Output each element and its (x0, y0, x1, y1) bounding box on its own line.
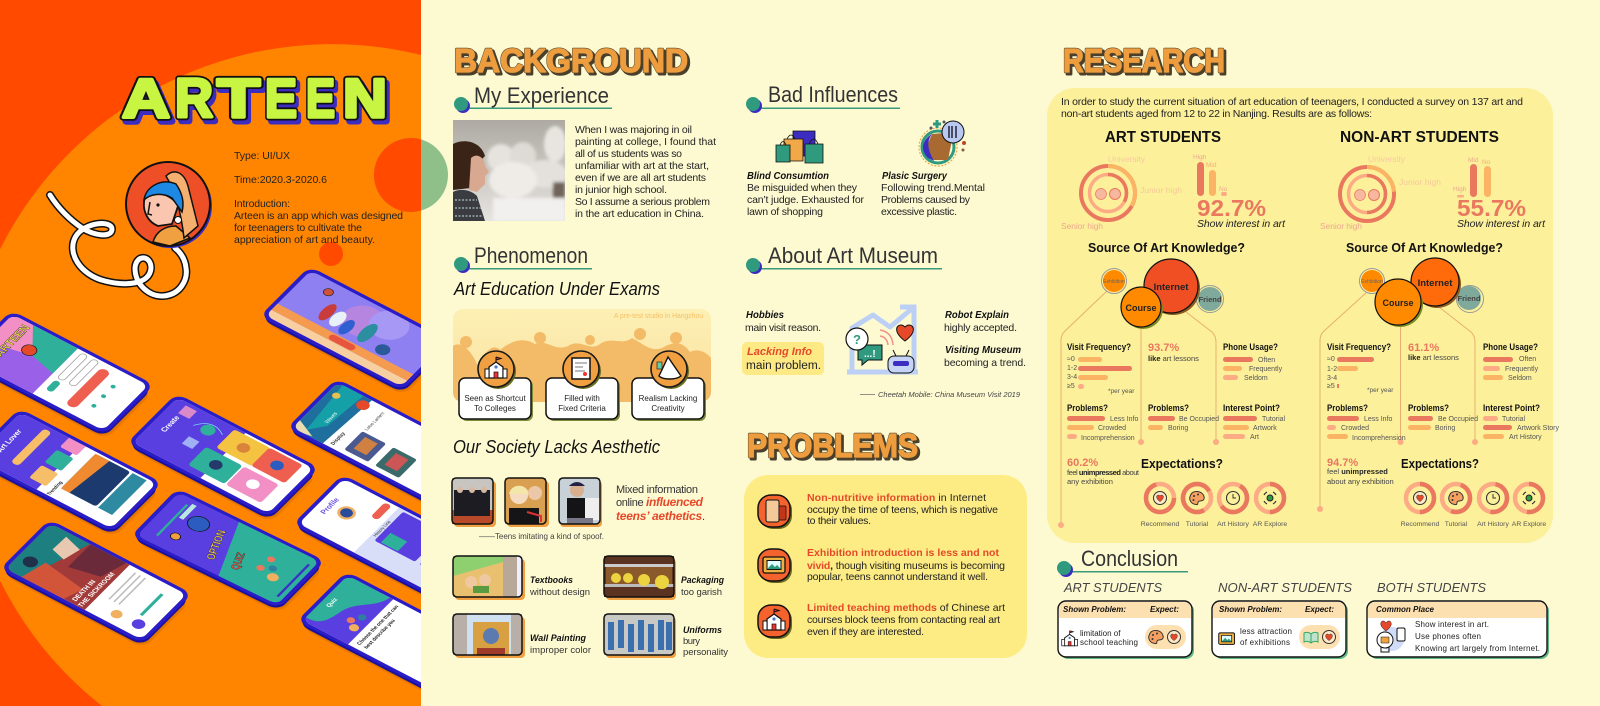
problem: exhibition introduction: popular, teens cannot understand it well. (807, 571, 988, 583)
chart: exhibition problems: Crowded (1341, 425, 1369, 432)
subheading: Phenomenon (454, 243, 592, 273)
problem: limited teaching methods: courses block teens from contacting real art (807, 614, 1000, 626)
stat: unimpressed: feel unimpressed (1327, 467, 1388, 476)
text: my experience body: unfamiliar with art at the start, (575, 160, 709, 172)
labels: expectations: AR Explore (1253, 521, 1287, 528)
panel: conclusion both students: Knowing art largely from Internet. (1415, 644, 1540, 653)
example: textbooks: without design (529, 587, 590, 598)
stat: unimpressed: feel unimpressed about (1067, 468, 1140, 477)
example: wall painting: Wall Painting (530, 633, 586, 644)
panel: conclusion non-art students (1212, 581, 1353, 659)
photos: teens imitating spoof (452, 478, 602, 527)
text: blind consumption: Blind Consumtion (747, 170, 829, 182)
chart: interest point: Art (1250, 434, 1259, 441)
heading: expectations: Expectations? (1141, 456, 1223, 471)
text: plastic surgery: excessive plastic. (881, 206, 957, 218)
text: mixed information: teens’ aethetics. (616, 509, 705, 523)
chart: visit frequency: ≈0 (1327, 356, 1335, 363)
panel: conclusion art students: limitation of (1080, 629, 1121, 638)
panel: problems (744, 475, 1027, 658)
text: my experience body: all of us students was so (575, 148, 682, 160)
heading: art students: ART STUDENTS (1105, 129, 1221, 146)
panel: conclusion both students: BOTH STUDENTS (1377, 581, 1487, 595)
title: ARTEEN: E (268, 71, 300, 133)
title: ARTEEN: E (306, 67, 335, 129)
example: uniforms: personality (683, 647, 728, 658)
chart: interest bars: Mid (1468, 157, 1479, 164)
labels: expectations: Art History (1217, 521, 1249, 528)
chart: interest bars: Show interest in art (1457, 218, 1546, 230)
card: realism lacking creativity: Creativity (651, 404, 685, 413)
card: fixed criteria: Fixed Criteria (558, 404, 606, 413)
text: plastic surgery (881, 170, 985, 218)
problem: exhibition introduction: Exhibition introduction is less and not (807, 547, 1000, 559)
small red dot (319, 242, 343, 266)
chart: phone usage (1223, 342, 1283, 382)
example: packaging: Packaging (681, 575, 724, 586)
subheading: About Art Museum: About Art Museum (768, 243, 938, 268)
example: uniforms: Uniforms (683, 625, 722, 636)
chart: phone usage: Often (1258, 357, 1275, 364)
icon: museum house robot (846, 307, 918, 373)
problem: exhibition introduction: vivid, though visiting museums is becoming (807, 560, 1005, 572)
callout: lacking info (742, 342, 824, 375)
stat: like art lessons (1148, 342, 1199, 363)
phone: display: Lotus Lantern (363, 411, 386, 431)
text: hobbies: Hobbies (746, 309, 784, 321)
phone: art lover (0, 412, 158, 534)
phone: display (291, 382, 421, 502)
chart: lesson problems: Problems? (1408, 403, 1449, 414)
stat: unimpressed (1327, 457, 1394, 486)
text: blind consumption: can’t judge. Exhausted for (747, 194, 864, 206)
panel: conclusion art students: school teaching (1080, 638, 1138, 647)
chart: phone usage: Frequently (1505, 366, 1539, 373)
connector lines (1320, 292, 1475, 509)
text: my experience body: painting at college, I found that (575, 136, 716, 148)
subheading: Phenomenon: Phenomenon (474, 243, 588, 268)
chart: visit frequency: *per year (1367, 387, 1394, 394)
title: ARTEEN: N (343, 67, 387, 129)
text: my experience body: So I assume a serious problem (575, 196, 710, 208)
stat: like art lessons: like art lessons (1148, 354, 1199, 363)
text: my experience body: even if we are all art students (575, 172, 706, 184)
text: my experience body: in junior high school. (575, 184, 667, 196)
title: ARTEEN: R (175, 67, 213, 129)
text: project info: Time:2020.3-2020.6 (234, 174, 327, 186)
labels: expectations (1141, 521, 1287, 528)
title: ARTEEN: R (175, 67, 213, 129)
problem: non-nutritive information: to their values. (807, 515, 871, 527)
panel: conclusion art students: Shown Problem: (1063, 605, 1126, 614)
column: non-art students (1317, 129, 1560, 528)
chart: knowledge bubbles: Friend (1458, 294, 1481, 303)
text: project info (234, 150, 403, 246)
text: research intro: In order to study the current situation of art education of teenagers, I conducted a survey on 137 art and (1061, 96, 1523, 108)
chart: exhibition problems: Less Info (1364, 416, 1393, 423)
panel: cover (0, 0, 421, 706)
chart: phone usage: Phone Usage? (1223, 342, 1278, 353)
chart: phone usage: Seldom (1508, 375, 1532, 382)
chart: lesson problems: Boring (1435, 425, 1455, 432)
chart: lesson problems: Boring (1168, 425, 1188, 432)
chart: expectation donuts (1406, 480, 1543, 516)
title: ARTEEN: T (217, 67, 260, 129)
chart: interest bars: No (1219, 186, 1228, 193)
title: ARTEEN: E (309, 71, 338, 133)
heading: PROBLEMS: PROBLEMS (747, 427, 918, 464)
caption: teens imitating: ——Teens imitating a kind of spoof. (479, 532, 604, 541)
heading: source of art knowledge: Source Of Art Knowledge? (1346, 240, 1503, 255)
phone: profile (297, 478, 421, 596)
chart: expectation donuts (1146, 479, 1284, 517)
panel: conclusion both students: Common Place (1376, 605, 1435, 614)
heading: BACKGROUND: BACKGROUND (454, 42, 688, 79)
icon: girl with pearl earring logo and squiggle (50, 162, 212, 296)
title: ARTEEN: N (346, 71, 390, 133)
chart: knowledge bubbles: Internet (1154, 282, 1189, 293)
phone: quiz: best describe you (363, 619, 397, 650)
chart: knowledge bubbles: Course (1382, 298, 1414, 308)
example: uniforms (604, 614, 728, 658)
subheading: My Experience: My Experience (474, 83, 609, 108)
column: art students (1058, 129, 1287, 528)
title: ARTEEN: A (122, 67, 170, 129)
example: wall painting: improper color (530, 645, 591, 656)
phone: death in the sickroom (4, 522, 188, 645)
stat: like art lessons: 93.7% (1148, 342, 1179, 354)
chart: interest bars: 55.7% (1457, 195, 1526, 221)
icon: museum house robot: ...! (864, 349, 876, 360)
phone: profile: Profile (318, 496, 341, 516)
stat: like art lessons: like art lessons (1408, 353, 1459, 362)
phone: login (0, 314, 150, 436)
chart: lesson problems: Problems? (1148, 403, 1189, 414)
example: uniforms: bury (683, 636, 700, 647)
title: ARTEEN: A (122, 67, 170, 129)
chart: interest bars: 92.7% (1197, 195, 1266, 221)
text: research intro (1061, 96, 1523, 120)
text: visiting museum: becoming a trend. (944, 357, 1026, 369)
panel: conclusion art students (1058, 581, 1194, 659)
heading: BACKGROUND: BACKGROUND (456, 44, 690, 81)
photo: museum visitor (453, 120, 565, 221)
decorative circle: red green (374, 138, 448, 212)
text: plastic surgery: Plasic Surgery (882, 170, 948, 182)
callout: lacking info: main problem. (746, 360, 821, 372)
card: shortcut to colleges: To Colleges (474, 404, 516, 413)
chart: interest point: Artwork Story (1517, 425, 1560, 432)
text: hobbies: main visit reason. (745, 322, 821, 334)
icon: museum house robot: ? (853, 332, 861, 347)
chart: interest point: Interest Point? (1483, 403, 1540, 414)
text: visiting museum: Visiting Museum (945, 344, 1021, 356)
chart: school level donut (1320, 154, 1441, 231)
heading: RESEARCH: RESEARCH (1063, 42, 1225, 79)
icon: plastic surgery face (919, 120, 966, 166)
text: blind consumption: lawn of shopping (747, 206, 823, 218)
card: fixed criteria: Filled with (564, 394, 600, 403)
phone: art lover: Trending (46, 480, 65, 496)
caption: pre-test studio: A pre-test studio in Hangzhou (614, 311, 703, 320)
chart: exhibition problems: Crowded (1098, 425, 1126, 432)
chart: visit frequency: Visit Frequency? (1067, 342, 1131, 353)
chart: visit frequency: ≥5 (1327, 383, 1335, 390)
text: robot explain: highly accepted. (944, 322, 1017, 334)
heading: RESEARCH: RESEARCH (1063, 42, 1225, 79)
chart: interest bars (1193, 154, 1286, 230)
labels: expectations: Art History (1477, 521, 1509, 528)
chart: visit frequency: 3-4 (1327, 375, 1337, 382)
panel: conclusion non-art students: less attraction (1240, 627, 1292, 636)
chart: interest bars: High (1193, 154, 1207, 161)
title: ARTEEN: A (125, 71, 173, 133)
stat: like art lessons: 61.1% (1408, 342, 1439, 354)
chart: exhibition problems: Less Info (1110, 416, 1139, 423)
stat: like art lessons (1408, 342, 1459, 362)
chart: school level donut: Senior high (1320, 221, 1362, 231)
chart: visit frequency (1067, 342, 1135, 395)
panel: conclusion both students (1367, 581, 1549, 659)
icon: shopping bags (776, 131, 823, 163)
panel: conclusion art students: ART STUDENTS (1063, 581, 1163, 595)
phone: quiz (301, 574, 421, 690)
problem: limited teaching methods (758, 602, 1005, 639)
phone: quiz: Quiz (326, 597, 340, 609)
chart: lesson problems (1148, 403, 1219, 432)
text: project info: appreciation of art and beauty. (234, 234, 375, 246)
text: visiting museum (944, 344, 1026, 369)
panel: conclusion both students: Show interest in art. (1415, 620, 1489, 629)
card: realism lacking creativity: Realism Lacking (639, 394, 697, 403)
phone: option quiz: OPTION (205, 529, 229, 561)
chart: visit frequency (1327, 342, 1394, 394)
chart: school level donut (1061, 154, 1182, 231)
chart: interest point: Tutorial (1262, 416, 1286, 423)
card: realism lacking creativity (632, 351, 706, 421)
chart: lesson problems (1408, 403, 1478, 432)
title: ARTEEN: E (265, 67, 297, 129)
panel: conclusion both students: Use phones often (1415, 632, 1481, 641)
phone: timeline (264, 270, 421, 392)
subheading: Our Society Lacks Aesthetic: Our Society Lacks Aesthetic (453, 437, 660, 457)
chart: visit frequency: ≥5 (1067, 383, 1075, 390)
text: hobbies (745, 309, 821, 334)
labels: expectations (1401, 521, 1546, 528)
chart: visit frequency: *per year (1108, 388, 1135, 395)
chart: interest point: Interest Point? (1223, 403, 1280, 414)
chart: knowledge bubbles: Friend (1199, 295, 1222, 304)
chart: school level donut: Senior high (1061, 221, 1103, 231)
panel: conclusion non-art students: Expect: (1305, 605, 1334, 614)
chart: school level donut: Junior high (1399, 177, 1441, 187)
chart: interest bars: Show interest in art (1197, 218, 1286, 230)
phone: quiz: Choose the one that can (356, 604, 401, 646)
title: ARTEEN: R (178, 71, 216, 133)
phone: option quiz (135, 492, 321, 610)
card: shortcut to colleges: Seen as Shortcut (464, 394, 526, 403)
text: mixed information (616, 484, 705, 523)
heading: source of art knowledge: Source Of Art Knowledge? (1088, 240, 1245, 255)
chart: exhibition problems: Problems? (1327, 403, 1368, 414)
subheading: Conclusion (1057, 546, 1188, 577)
chart: interest point (1223, 403, 1286, 441)
phone: profile: History Line (372, 519, 392, 537)
chart: knowledge bubbles (1102, 259, 1224, 329)
example: textbooks (453, 556, 590, 600)
panel: research (1047, 88, 1560, 543)
panel: conclusion non-art students: of exhibitions (1240, 638, 1290, 647)
chart: exhibition problems: Incomprehension (1081, 435, 1135, 442)
card: fixed criteria (546, 351, 620, 421)
stat: unimpressed: about any exhibition (1327, 477, 1394, 486)
text: project info: for teenagers to cultivate the (234, 222, 362, 234)
text: project info: Introduction: (234, 198, 290, 210)
chart: knowledge bubbles: Exhibition (1361, 279, 1383, 285)
heading: non-art students: NON-ART STUDENTS (1340, 129, 1499, 146)
stat: unimpressed: 94.7% (1327, 457, 1358, 469)
text: project info: Type: UI/UX (234, 150, 290, 162)
heading: RESEARCH: RESEARCH (1065, 44, 1227, 81)
text: mixed information: Mixed information (616, 484, 698, 496)
chart: exhibition problems: Problems? (1067, 403, 1108, 414)
title: ARTEEN: T (217, 67, 260, 129)
chart: phone usage: Seldom (1244, 375, 1268, 382)
panel: conclusion art students: Expect: (1150, 605, 1179, 614)
chart: interest bars: No (1482, 159, 1491, 166)
chart: visit frequency: 3-4 (1067, 374, 1077, 381)
card: shortcut to colleges (459, 351, 533, 421)
labels: expectations: Recommend (1141, 521, 1179, 528)
panel: conclusion non-art students: NON-ART STUDENTS (1218, 581, 1353, 595)
chart: knowledge bubbles: Exhibition (1103, 279, 1125, 285)
text: blind consumption: Be misguided when they (747, 182, 858, 194)
chart: exhibition problems: Incomprehension (1352, 435, 1406, 442)
chart: interest point: Art History (1509, 434, 1542, 441)
title: ARTEEN: E (306, 67, 335, 129)
chart: lesson problems: Be Occupied (1179, 416, 1219, 423)
problem: limited teaching methods: even if they are interested. (807, 626, 924, 638)
problem: non-nutritive information: Non-nutritive information in Internet (807, 492, 986, 504)
phone: option quiz: QUIZ (229, 551, 248, 571)
chart: knowledge bubbles (1360, 258, 1484, 327)
text: blind consumption (747, 170, 864, 218)
labels: expectations: AR Explore (1512, 521, 1546, 528)
examples: textbooks packaging wall painting uniforms (453, 556, 728, 658)
heading: expectations: Expectations? (1401, 456, 1479, 471)
panel: conclusion non-art students: Shown Problem: (1219, 605, 1282, 614)
text: project info: Arteen is an app which was designed (234, 210, 403, 222)
heading: BACKGROUND: BACKGROUND (454, 42, 688, 79)
phone: create (131, 396, 315, 519)
chart: interest bars: Mid (1206, 162, 1217, 169)
heading: PROBLEMS: PROBLEMS (749, 429, 920, 466)
problem: exhibition introduction (758, 547, 1005, 583)
chart: interest point: Tutorial (1502, 416, 1526, 423)
text: robot explain (944, 309, 1017, 334)
subheading: Art Education Under Exams: Art Education Under Exams (453, 279, 660, 299)
text: my experience body: When I was majoring in oil (575, 124, 692, 136)
chart: knowledge bubbles: Course (1125, 303, 1157, 313)
phone: display: Waves (324, 411, 340, 425)
problem: non-nutritive information: occupy the time of teens, which is negative (807, 504, 998, 516)
title: ARTEEN: E (265, 67, 297, 129)
chart: school level donut: Junior high (1140, 185, 1182, 195)
title: ARTEEN: N (343, 67, 387, 129)
chart: visit frequency: Visit Frequency? (1327, 342, 1391, 353)
chart: visit frequency: ≈0 (1067, 356, 1075, 363)
heading: PROBLEMS: PROBLEMS (747, 427, 918, 464)
chart: school level donut: University (1108, 154, 1146, 164)
example: textbooks: Textbooks (530, 575, 573, 586)
stat: unimpressed: 60.2% (1067, 457, 1098, 469)
title: ARTEEN (122, 67, 390, 133)
phone: death in the sickroom: THE SICKROOM (77, 571, 117, 609)
text: mixed information: online influenced (616, 495, 704, 509)
problem: limited teaching methods: Limited teaching methods of Chinese art (807, 602, 1005, 614)
chart: exhibition problems (1327, 403, 1406, 442)
chart: school level donut: University (1368, 154, 1406, 164)
chart: interest bars (1453, 157, 1546, 230)
text: plastic surgery: Following trend.Mental (881, 182, 985, 194)
phone: create: Create (158, 414, 182, 434)
chart: lesson problems: Be Occupied (1438, 416, 1478, 423)
stat: unimpressed (1067, 457, 1140, 486)
subheading: Conclusion: Conclusion (1081, 546, 1178, 571)
callout: lacking info: Lacking Info (747, 346, 812, 358)
connector lines (1061, 291, 1216, 525)
labels: expectations: Recommend (1401, 521, 1439, 528)
chart: phone usage: Phone Usage? (1483, 342, 1538, 353)
photo: pre-test studio silhouette (453, 328, 711, 402)
subheading: Bad Influences: Bad Influences (768, 82, 898, 107)
stat: unimpressed: any exhibition (1067, 477, 1113, 486)
chart: interest bars: High (1453, 186, 1467, 193)
chart: interest point: Artwork (1253, 425, 1277, 432)
chart: knowledge bubbles: Internet (1418, 278, 1453, 289)
chart: phone usage (1483, 342, 1539, 382)
subheading: About Art Museum (746, 243, 942, 274)
phone: death in the sickroom: DEATH IN (71, 579, 98, 603)
text: plastic surgery: Problems caused by (881, 194, 971, 206)
title: ARTEEN: T (220, 71, 263, 133)
chart: visit frequency: 1-2 (1067, 365, 1077, 372)
example: wall painting (453, 614, 591, 658)
text: my experience body (575, 124, 716, 220)
chart: phone usage: Frequently (1249, 366, 1283, 373)
chart: interest point (1483, 403, 1560, 441)
subheading: Bad Influences (746, 82, 900, 113)
caption: cheetah mobile: Cheetah Mobile: China Museum Visit 2019 (878, 390, 1021, 399)
text: robot explain: Robot Explain (945, 309, 1009, 321)
problem: non-nutritive information (758, 492, 998, 529)
chart: phone usage: Often (1519, 356, 1536, 363)
labels: expectations: Tutorial (1445, 521, 1468, 528)
phone: display: Display (330, 431, 347, 446)
example: packaging: too garish (681, 587, 722, 598)
labels: expectations: Tutorial (1186, 521, 1209, 528)
example: packaging (604, 556, 724, 600)
text: my experience body: in the art education in China. (575, 208, 704, 220)
text: research intro: non-art students aged from 12 to 22 in Nanjing. Results are as follows: (1061, 108, 1372, 120)
chart: exhibition problems (1067, 403, 1139, 442)
chart: visit frequency: 1-2 (1327, 366, 1337, 373)
panel: art education under exams (453, 309, 711, 421)
